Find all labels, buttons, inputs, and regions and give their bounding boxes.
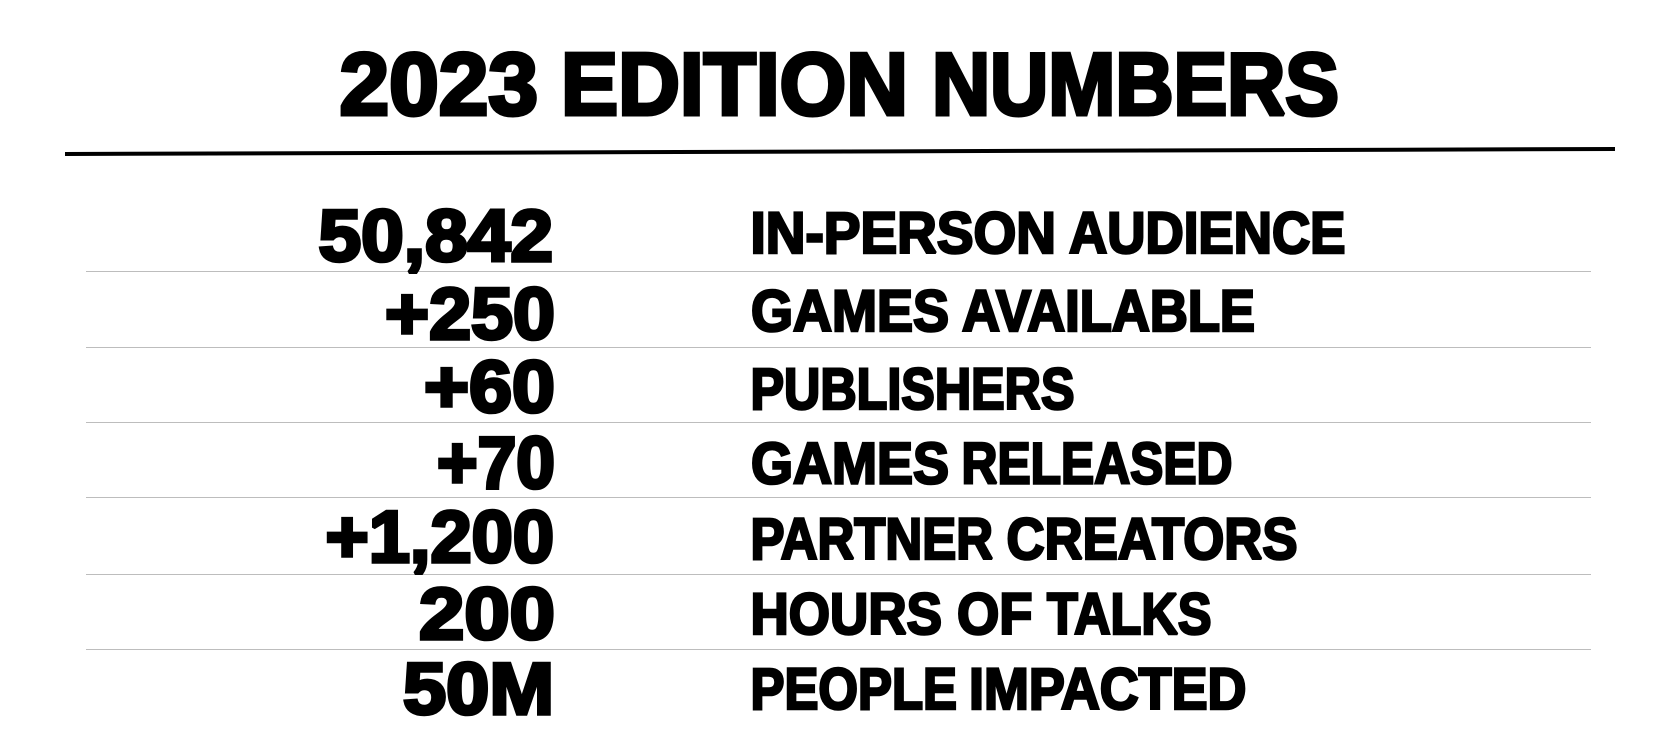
row: games released <box>437 423 1232 504</box>
row: people impacted: IMPACTED <box>969 657 1246 722</box>
row: games available: GAMES <box>751 279 949 344</box>
row: games available: +250 <box>385 274 555 355</box>
title: NUMBERS <box>932 34 1339 134</box>
row: publishers: +60 <box>424 347 555 428</box>
title: 2023 <box>340 34 538 134</box>
row: hours of talks: OF <box>957 582 1032 647</box>
row: hours of talks <box>419 574 1212 655</box>
row: publishers <box>424 347 1074 428</box>
row: in-person audience: 50,842 <box>318 196 553 277</box>
row: hours of talks: HOURS <box>750 582 942 647</box>
title <box>340 34 1339 134</box>
title: EDITION <box>561 34 908 134</box>
row: games released: RELEASED <box>962 432 1232 496</box>
row: hours of talks: 200 <box>419 574 555 655</box>
row: games released: +70 <box>437 423 555 504</box>
row: partner creators: CREATORS <box>1006 507 1298 572</box>
row: partner creators: +1,200 <box>326 497 554 578</box>
row: people impacted <box>403 649 1246 730</box>
row: in-person audience <box>318 196 1346 277</box>
row: games available <box>385 274 1255 355</box>
row: publishers: PUBLISHERS <box>750 357 1074 422</box>
heading rule <box>65 147 1615 156</box>
row: partner creators: PARTNER <box>750 507 993 572</box>
row: in-person audience: IN-PERSON <box>750 201 1056 266</box>
row: partner creators <box>326 497 1298 578</box>
row: games available: AVAILABLE <box>962 279 1255 344</box>
row: people impacted: PEOPLE <box>750 657 957 722</box>
row: games released: GAMES <box>751 432 949 496</box>
row: hours of talks: TALKS <box>1047 582 1212 647</box>
row: people impacted: 50M <box>403 649 554 730</box>
row: in-person audience: AUDIENCE <box>1069 201 1346 266</box>
